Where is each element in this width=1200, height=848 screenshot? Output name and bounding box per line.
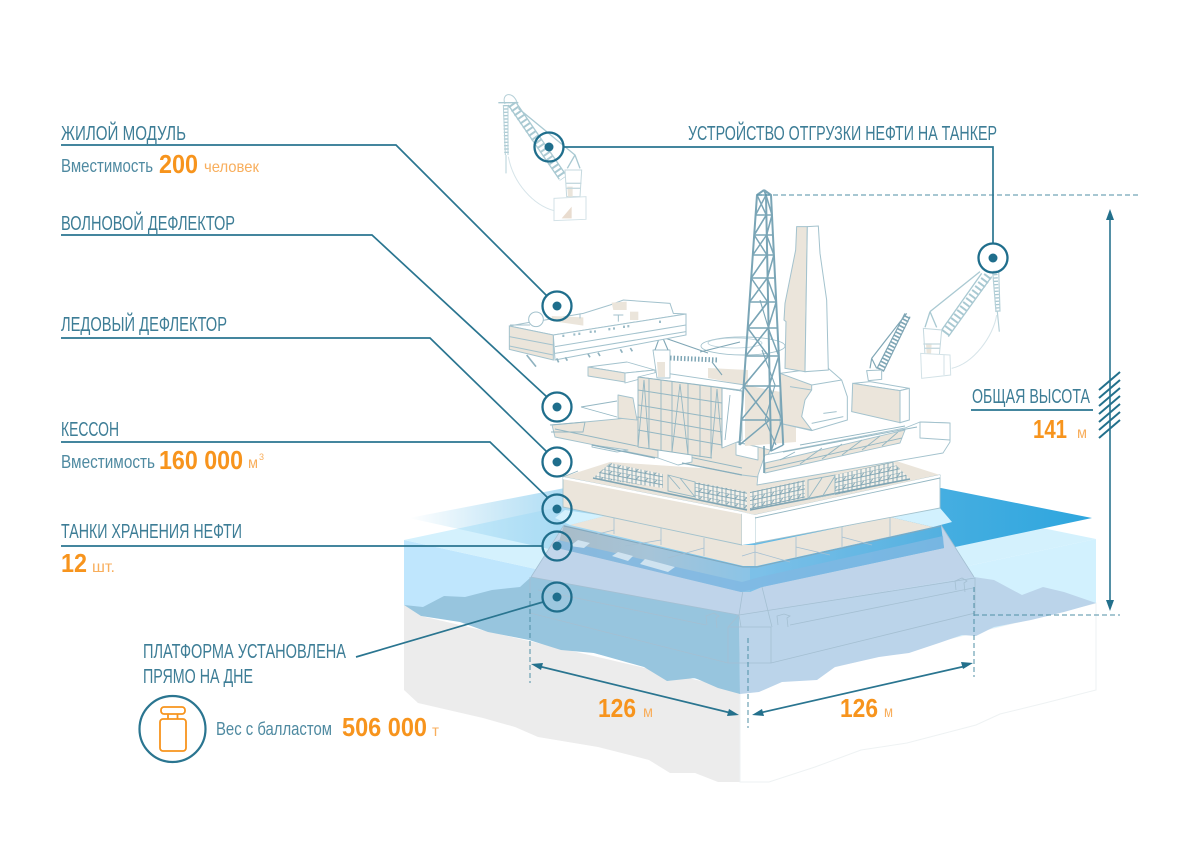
callout: caisson: 160 000 <box>159 445 243 475</box>
accommodation module <box>509 300 686 367</box>
drilling derrick <box>740 190 783 451</box>
callout: wave deflector: ВОЛНОВОЙ ДЕФЛЕКТОР <box>61 211 235 235</box>
text: ballast weight <box>216 712 440 742</box>
dimension: width arrows <box>530 587 974 728</box>
callout: wave deflector <box>61 211 572 422</box>
crane top-left (exploded view) <box>498 95 586 221</box>
text: ballast weight: Вес с балластом <box>216 719 332 739</box>
lower superstructure box <box>563 460 940 545</box>
callout: caisson: м <box>248 455 258 472</box>
label: 126 left: 126 <box>598 693 636 723</box>
callout: platform on the seabed <box>143 582 572 688</box>
label: 126 right: м <box>884 704 893 721</box>
central module with braced grid <box>638 372 745 458</box>
deck crane on module <box>653 336 740 378</box>
callout: offloading device: УСТРОЙСТВО ОТГРУЗКИ НЕФТИ НА ТАНКЕР <box>688 121 997 145</box>
label: total height <box>971 386 1093 444</box>
label: total height: м <box>1077 425 1087 442</box>
label: 126 left: м <box>643 704 653 721</box>
caisson under water <box>530 525 975 663</box>
callout: ice deflector: ЛЕДОВЫЙ ДЕФЛЕКТОР <box>61 312 227 336</box>
water volume <box>404 506 1096 690</box>
callout: platform on the seabed: ПЛАТФОРМА УСТАНОВЛЕНА <box>143 641 346 663</box>
callout: ice deflector <box>61 312 572 476</box>
text: ballast weight: 506 000 <box>342 712 427 742</box>
callout: caisson: КЕССОН <box>61 419 119 441</box>
caisson ice belt band <box>557 525 944 592</box>
helideck <box>701 337 796 446</box>
text: ballast weight: т <box>432 723 440 740</box>
callout: oil storage tanks: 12 <box>61 548 87 578</box>
callout: offloading device <box>534 121 1008 272</box>
callout: living module: Вместимость <box>61 156 153 176</box>
label: total height: 141 <box>1033 414 1067 444</box>
callout: oil storage tanks: ТАНКИ ХРАНЕНИЯ НЕФТИ <box>61 521 242 543</box>
callout: platform on the seabed: ПРЯМО НА ДНЕ <box>143 666 253 688</box>
callout: living module: 200 <box>159 149 198 179</box>
water surface with gradient <box>409 488 1092 592</box>
dimension: total height <box>757 195 1140 615</box>
crane right (offloading device) <box>921 270 1000 378</box>
callout: caisson <box>61 419 572 524</box>
callout: caisson: Вместимость <box>61 452 155 472</box>
seabed under water <box>404 577 1096 694</box>
callout: oil storage tanks <box>61 521 572 578</box>
label: total height: ОБЩАЯ ВЫСОТА <box>972 386 1090 408</box>
callout: oil storage tanks: шт. <box>92 559 115 576</box>
hull deck <box>550 395 950 485</box>
flare tower block <box>780 226 847 431</box>
callout: living module <box>61 121 572 320</box>
callout: living module: человек <box>204 159 260 176</box>
lattice panels <box>593 463 663 488</box>
light patch and tan caisson top deck <box>555 508 952 566</box>
label: 126 right: 126 <box>840 693 878 723</box>
callout: caisson: 3 <box>259 452 264 462</box>
callout: living module: ЖИЛОЙ МОДУЛЬ <box>61 121 186 145</box>
deck crane right with box <box>852 313 910 423</box>
small deck module <box>588 362 655 383</box>
seabed ground block <box>404 603 1096 782</box>
icon: weight <box>140 696 206 762</box>
